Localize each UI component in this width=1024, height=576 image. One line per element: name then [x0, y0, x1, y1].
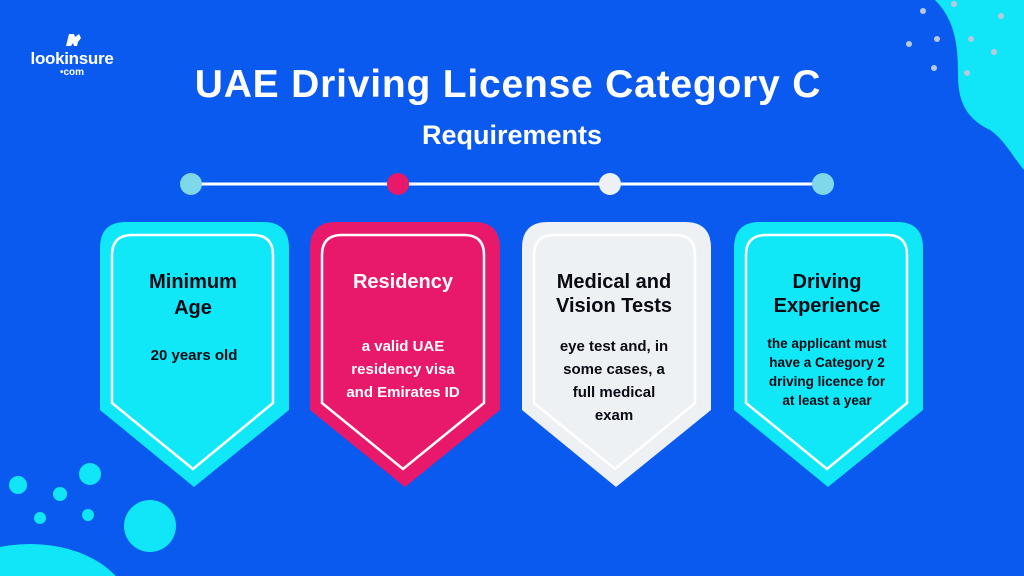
card: medical and vision tests [522, 222, 711, 487]
logo [31, 34, 113, 78]
card: minimum age: 20 years old [151, 347, 237, 364]
card: medical and vision tests: full medical [573, 384, 655, 401]
card: residency: a valid UAE [362, 338, 444, 355]
subtitle: Requirements [422, 120, 602, 150]
decoration: bottom-left bubbles [0, 463, 176, 576]
card: residency: Residency [353, 271, 454, 293]
card: driving experience: Driving [793, 271, 861, 293]
card: driving experience: the applicant must [767, 336, 887, 351]
card: driving experience: at least a year [782, 393, 872, 408]
title: UAE Driving License Category C [195, 63, 821, 106]
card: residency [310, 222, 500, 487]
timeline [180, 173, 834, 195]
logo: •com [60, 67, 84, 78]
card: residency: residency visa [351, 361, 455, 378]
card: medical and vision tests: Vision Tests [556, 295, 672, 317]
card: medical and vision tests: Medical and [557, 271, 671, 293]
card: driving experience: have a Category 2 [769, 355, 885, 370]
card: medical and vision tests: exam [595, 407, 633, 424]
card: minimum age: Age [174, 297, 212, 319]
card: minimum age: Minimum [149, 271, 237, 293]
logo: lookinsure [31, 49, 113, 68]
card: driving experience: Experience [774, 295, 880, 317]
decoration: top-right blob [906, 0, 1024, 170]
card: medical and vision tests: some cases, a [563, 361, 666, 378]
card: minimum age [100, 222, 289, 487]
card: driving experience [734, 222, 923, 487]
card: driving experience: driving licence for [769, 374, 886, 389]
card: residency: and Emirates ID [346, 384, 460, 401]
card: medical and vision tests: eye test and, in [560, 338, 668, 355]
